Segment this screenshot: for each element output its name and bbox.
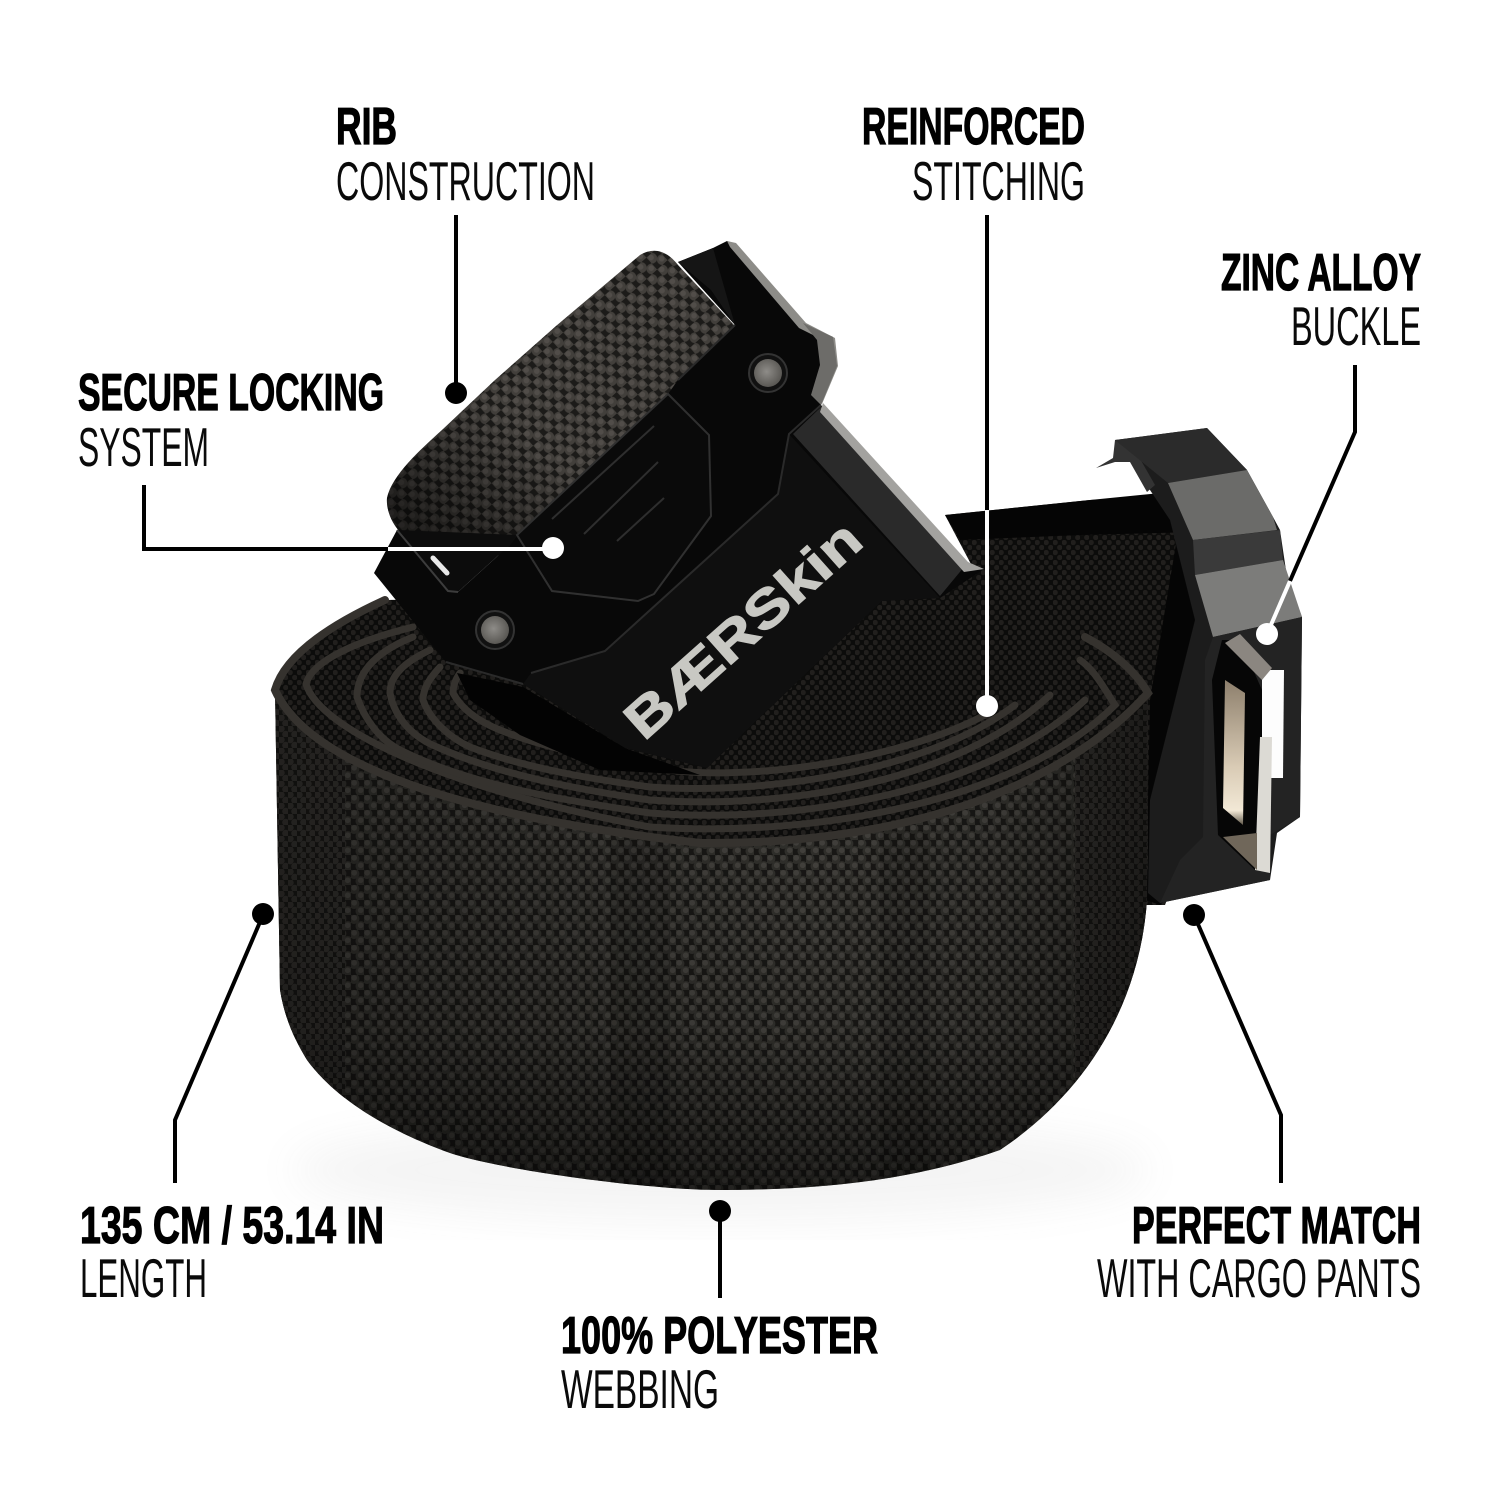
coil interior	[275, 590, 1148, 870]
chrome lower	[1223, 833, 1257, 870]
white slot	[1262, 670, 1284, 778]
callout: length: 135 CM / 53.14 IN	[80, 1197, 384, 1255]
callout: polyester webbing: 100% POLYESTER	[561, 1307, 878, 1365]
callout: zinc alloy buckle	[1221, 244, 1421, 645]
dark stripe	[1193, 530, 1283, 575]
grey facet	[1168, 470, 1277, 540]
rivet top	[749, 354, 787, 392]
slot surround	[397, 530, 517, 592]
silver top edge	[727, 241, 838, 404]
callout: secure locking system	[78, 364, 564, 559]
inner black window	[1212, 640, 1262, 870]
rivet bottom	[476, 611, 514, 649]
upper facet	[678, 248, 735, 325]
callout: length: LENGTH	[80, 1247, 207, 1309]
callout: reinforced stitching	[862, 98, 1085, 717]
buckle body	[374, 241, 984, 768]
right buckle end	[1096, 428, 1302, 903]
callout: length	[80, 903, 384, 1309]
callout: reinforced stitching: REINFORCED	[862, 98, 1085, 156]
callout: polyester webbing	[561, 1200, 878, 1420]
hook tip	[1096, 440, 1155, 492]
logo: BÆRSkin	[613, 509, 874, 751]
shadow under buckle	[457, 673, 700, 775]
belt infographic	[78, 107, 1422, 1408]
metal tongue	[1223, 680, 1245, 825]
silver lower edge	[820, 403, 984, 572]
callout: rib construction: CONSTRUCTION	[336, 150, 595, 212]
callout: rib construction	[336, 98, 595, 404]
callout: reinforced stitching: STITCHING	[912, 150, 1085, 212]
floor shadow	[290, 1120, 1150, 1220]
lower right facet	[793, 407, 964, 596]
chrome top edge	[1225, 634, 1272, 680]
coil edge rings	[275, 600, 1148, 843]
back strap of the belt	[945, 490, 1230, 905]
callout: secure locking system: SYSTEM	[78, 416, 209, 478]
body edge lines	[446, 325, 821, 684]
plate ridges	[552, 426, 664, 541]
inner strap behind buckle	[760, 570, 1120, 790]
front webbing face	[270, 680, 1155, 1200]
lower body	[1160, 617, 1302, 903]
top facet	[1115, 428, 1247, 483]
lower grey facet	[1195, 560, 1302, 637]
lower body panel	[523, 434, 940, 768]
callout: secure locking system: SECURE LOCKING	[78, 364, 384, 422]
callout: perfect match	[1097, 904, 1421, 1309]
callout: polyester webbing: WEBBING	[561, 1358, 719, 1420]
slot highlight	[433, 558, 447, 573]
ribbed strap	[387, 251, 735, 560]
locking plate	[517, 394, 711, 601]
chrome strip	[1255, 737, 1272, 873]
front rim stroke	[275, 690, 1148, 843]
main buckle and ribbed strap	[374, 241, 984, 775]
callout: rib construction: RIB	[336, 98, 397, 156]
buckle end silhouette	[1115, 428, 1302, 903]
